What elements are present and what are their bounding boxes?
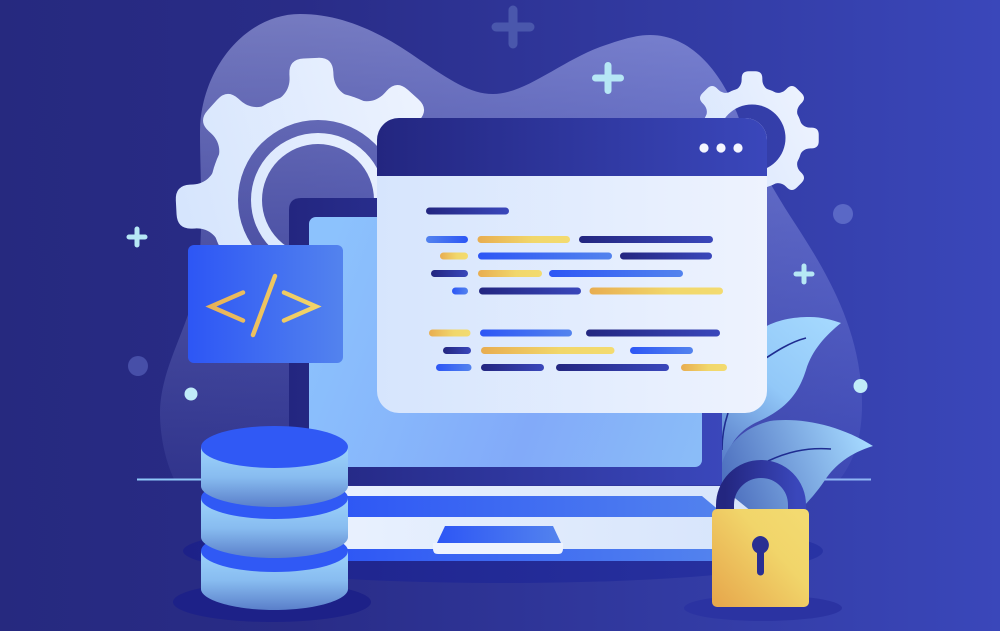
code lines <box>426 208 727 371</box>
leaf upper <box>722 317 841 470</box>
disk bottom <box>201 551 348 610</box>
laptop screen frame <box>289 198 722 485</box>
icon: padlock <box>712 469 809 607</box>
icon: code brackets <box>211 276 316 335</box>
ground shadow under laptop <box>183 519 823 583</box>
code tag tile <box>188 245 343 363</box>
icon: large gear <box>176 58 424 245</box>
icon: database stack <box>201 426 348 610</box>
laptop <box>289 198 762 561</box>
code window <box>377 118 767 413</box>
leaf lower <box>722 420 873 520</box>
database shadow <box>173 582 371 622</box>
disk middle <box>201 498 348 558</box>
padlock keyhole <box>752 536 769 576</box>
dot right muted <box>833 204 853 224</box>
tile background <box>188 245 343 363</box>
icon: plus near window <box>596 66 620 90</box>
laptop base <box>330 486 762 549</box>
icon: plus left <box>129 229 145 245</box>
lock shadow <box>684 595 842 621</box>
horizon line left <box>137 478 207 480</box>
disk top <box>201 447 348 507</box>
trackpad lip <box>433 543 563 554</box>
window header <box>377 118 767 176</box>
icon: plus right <box>796 266 812 282</box>
window control dots <box>699 143 743 153</box>
leaf veins <box>722 338 831 461</box>
padlock shackle <box>725 469 797 514</box>
plant leaves <box>722 317 873 520</box>
trackpad <box>437 526 561 543</box>
padlock body <box>712 509 809 607</box>
icon: large plus top <box>496 10 530 44</box>
background blob <box>160 14 862 479</box>
dot left muted <box>128 356 148 376</box>
keyboard <box>330 496 727 517</box>
dot right light <box>854 379 868 393</box>
window body <box>377 118 767 413</box>
horizon line right <box>815 478 871 480</box>
laptop front edge <box>330 549 720 561</box>
icon: small gear <box>700 71 819 190</box>
laptop screen <box>309 217 702 467</box>
dot left light <box>184 388 198 400</box>
